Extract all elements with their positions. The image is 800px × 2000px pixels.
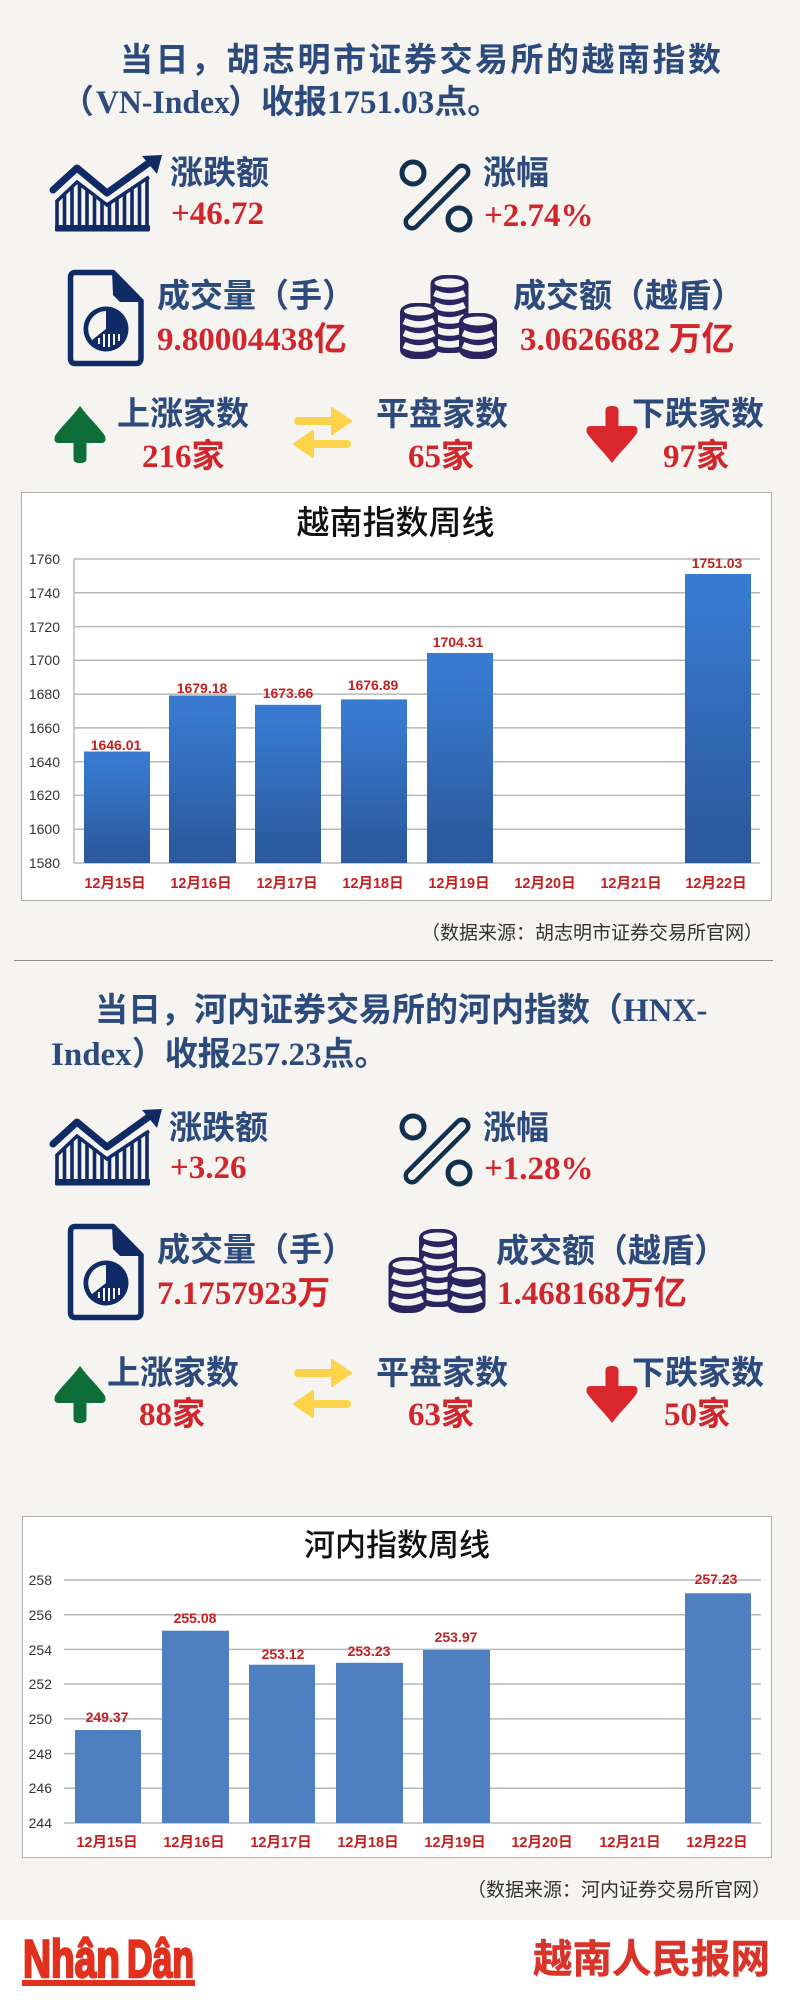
label: decliners: 97家 <box>663 438 729 475</box>
panel: HNX-Index weekly chart: 249.37 <box>86 1709 129 1725</box>
label: change amount <box>169 1109 268 1186</box>
panel: VN-Index weekly chart: 1704.31 <box>433 634 484 650</box>
panel: VN-Index weekly chart: 12月17日 <box>256 876 318 892</box>
label: change percent: 涨幅 <box>483 1109 549 1146</box>
chart title: 河内指数周线 <box>304 1528 490 1563</box>
panel: HNX-Index weekly chart: 12月22日 <box>686 1835 748 1851</box>
icon: percent <box>402 162 470 230</box>
panel: VN-Index weekly chart: 1679.18 <box>177 680 228 696</box>
label: change amount: +3.26 <box>170 1150 247 1186</box>
panel: HNX-Index weekly chart: 255.08 <box>174 1610 217 1626</box>
icon: green up arrow <box>54 1366 106 1423</box>
panel: HNX-Index weekly chart: 12月17日 <box>250 1835 312 1851</box>
panel: VN-Index weekly chart: 1740 <box>29 585 60 601</box>
heading: VN-Index <box>61 42 724 121</box>
label: change amount: 涨跌额 <box>169 1109 268 1146</box>
panel: VN-Index weekly chart: 12月21日 <box>600 876 662 892</box>
panel: VN-Index weekly chart: 1680 <box>29 686 60 702</box>
panel: HNX-Index weekly chart: 253.23 <box>348 1643 391 1659</box>
label: decliners: 下跌家数 <box>632 395 764 432</box>
panel: VN-Index weekly chart: 1580 <box>29 855 60 871</box>
label: change percent <box>483 154 594 234</box>
panel: HNX-Index weekly chart: 253.97 <box>435 1629 478 1645</box>
panel: HNX-Index weekly chart: 256 <box>29 1607 52 1623</box>
panel: VN-Index weekly chart: 12月22日 <box>685 876 747 892</box>
heading: VN-Index: （ <box>61 85 94 121</box>
logo: Nhan Dan: Nhân <box>23 1930 120 1989</box>
panel: HNX-Index weekly chart: 248 <box>29 1746 52 1762</box>
icon: percent <box>402 1116 470 1184</box>
panel: VN-Index weekly chart <box>22 492 772 900</box>
panel: HNX-Index weekly chart: 12月18日 <box>337 1835 399 1851</box>
source note: HOSE: （数据来源：胡志明市证券交易所官网） <box>421 922 763 944</box>
panel: VN-Index weekly chart: 1660 <box>29 720 60 736</box>
panel: HNX-Index weekly chart: 254 <box>29 1642 52 1658</box>
panel: HNX-Index weekly chart: 12月20日 <box>511 1835 573 1851</box>
icon: coins <box>388 1229 486 1313</box>
panel: VN-Index weekly chart: 12月19日 <box>428 876 490 892</box>
panel: HNX-Index weekly chart: 257.23 <box>695 1571 738 1587</box>
label: change amount: +46.72 <box>171 196 264 232</box>
icon: red down arrow <box>586 406 638 463</box>
label: turnover: 成交额（越盾） <box>513 277 744 314</box>
panel: HNX-Index weekly chart: 253.12 <box>262 1646 305 1662</box>
source note: HNX: （数据来源：河内证券交易所官网） <box>467 1879 771 1901</box>
panel: HNX-Index weekly chart: 12月19日 <box>424 1835 486 1851</box>
panel: VN-Index weekly chart: 1646.01 <box>91 737 142 753</box>
panel: VN-Index weekly chart: 1620 <box>29 787 60 803</box>
label: advancers: 上涨家数 <box>107 1354 239 1391</box>
label: unchanged: 平盘家数 <box>376 395 508 432</box>
label: change percent: 涨幅 <box>483 154 549 191</box>
panel: VN-Index weekly chart: 1640 <box>29 754 60 770</box>
label: decliners <box>632 395 764 475</box>
label: turnover: 3.0626682 万亿 <box>520 321 734 358</box>
label: volume: 7.1757923万 <box>157 1276 330 1312</box>
label: change amount <box>170 154 269 232</box>
panel: VN-Index weekly chart: 1676.89 <box>348 677 399 693</box>
label: unchanged <box>376 395 508 475</box>
label: advancers: 216家 <box>142 438 224 475</box>
label: advancers: 上涨家数 <box>117 395 249 432</box>
panel: VN-Index weekly chart: 1700 <box>29 652 60 668</box>
label: change percent: +1.28% <box>484 1151 594 1187</box>
heading: HNX-Index: Index）收报257.23点。 <box>51 1036 387 1073</box>
panel: VN-Index weekly chart: 12月16日 <box>170 876 232 892</box>
label: volume <box>157 1231 355 1312</box>
label: decliners <box>632 1354 764 1433</box>
label: volume <box>157 277 355 358</box>
label: volume: 9.80004438亿 <box>157 321 347 358</box>
panel: HNX-Index weekly chart: 12月16日 <box>163 1835 225 1851</box>
icon: rising chart <box>53 155 162 232</box>
label: turnover: 1.468168万亿 <box>497 1275 687 1312</box>
icon: rising chart <box>53 1109 162 1186</box>
panel: VN-Index weekly chart: 1720 <box>29 619 60 635</box>
icon: yellow flat arrows <box>294 1360 351 1417</box>
panel: VN-Index weekly chart: 1751.03 <box>692 555 743 571</box>
panel: VN-Index weekly chart: 1600 <box>29 821 60 837</box>
panel: HNX-Index weekly chart: 258 <box>29 1572 52 1588</box>
footer band <box>0 1920 800 2000</box>
panel: VN-Index weekly chart: 1760 <box>29 551 60 567</box>
panel: HNX-Index weekly chart: 244 <box>29 1815 52 1831</box>
label: change percent: +2.74% <box>484 198 594 234</box>
label: unchanged <box>376 1354 508 1433</box>
label: decliners: 下跌家数 <box>632 1354 764 1391</box>
label: volume: 成交量（手） <box>157 277 355 314</box>
icon: document with pie chart <box>70 1225 143 1318</box>
label: turnover <box>513 277 744 358</box>
label: turnover: 成交额（越盾） <box>496 1232 727 1269</box>
label: advancers: 88家 <box>139 1396 205 1433</box>
panel: HNX-Index weekly chart: 250 <box>29 1711 52 1727</box>
chart title: 越南指数周线 <box>296 504 494 541</box>
label: unchanged: 65家 <box>408 438 474 475</box>
label: volume: 成交量（手） <box>157 1231 355 1268</box>
label: decliners: 50家 <box>664 1396 730 1433</box>
panel: VN-Index weekly chart: 1673.66 <box>263 685 314 701</box>
label: unchanged: 63家 <box>408 1396 474 1433</box>
label: turnover <box>496 1232 727 1312</box>
panel: HNX-Index weekly chart: 12月15日 <box>76 1835 138 1851</box>
icon: coins <box>400 275 497 359</box>
heading: VN-Index: 当日，胡志明市证券交易所的越南指数 <box>120 42 724 79</box>
footer title: 越南人民报网 <box>533 1938 770 1982</box>
label: change percent <box>483 1109 594 1187</box>
icon: yellow flat arrows <box>294 408 351 457</box>
icon: red down arrow <box>586 1366 638 1423</box>
panel: HNX-Index weekly chart: 252 <box>29 1676 52 1692</box>
heading: HNX-Index <box>51 992 707 1073</box>
label: advancers <box>117 395 249 475</box>
panel: HNX-Index weekly chart: 246 <box>29 1780 52 1796</box>
logo: Nhan Dan: Dân <box>127 1930 194 1989</box>
panel: VN-Index weekly chart: 12月18日 <box>342 876 404 892</box>
panel: VN-Index weekly chart: 12月15日 <box>84 876 146 892</box>
panel: HNX-Index weekly chart: 12月21日 <box>599 1835 661 1851</box>
heading: VN-Index: ）收报1751.03点。 <box>228 84 500 121</box>
panel: HNX-Index weekly chart <box>22 1516 772 1858</box>
label: unchanged: 平盘家数 <box>376 1354 508 1391</box>
icon: document with pie chart <box>70 271 143 364</box>
heading: VN-Index: VN-Index <box>96 85 230 121</box>
label: change amount: 涨跌额 <box>170 154 269 191</box>
heading: HNX-Index: 当日，河内证券交易所的河内指数（HNX- <box>95 992 707 1029</box>
icon: green up arrow <box>54 406 106 463</box>
panel: VN-Index weekly chart: 12月20日 <box>514 876 576 892</box>
label: advancers <box>107 1354 239 1433</box>
